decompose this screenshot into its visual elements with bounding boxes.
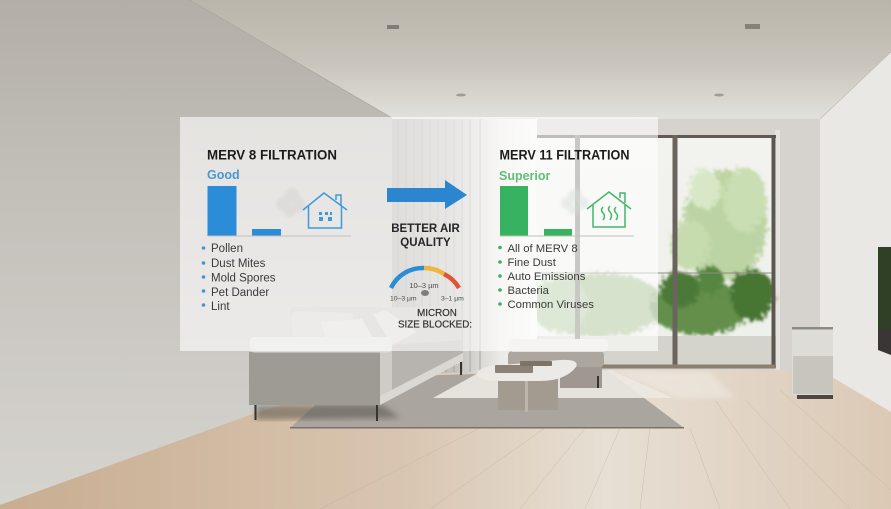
list: MERV 8 captures: Pollen	[211, 243, 243, 255]
icon: smoke cloud	[276, 188, 306, 217]
bar chart: MERV 8	[208, 186, 351, 236]
label: micron size blocked: SIZE BLOCKED:	[398, 320, 472, 330]
coffee table with books	[477, 360, 577, 412]
rating: Good: Good	[207, 168, 240, 182]
list: MERV 8 captures: Pet Dander	[211, 287, 269, 299]
panel: MERV 8	[202, 148, 351, 313]
list: MERV 8 captures: Lint	[211, 301, 230, 313]
gauge: micron size	[390, 268, 464, 302]
translucent panel	[180, 117, 658, 351]
sofa	[249, 307, 463, 421]
bar chart: MERV 11	[500, 186, 634, 236]
gauge: micron size: 10–3 µm	[409, 281, 439, 290]
label: better air quality	[391, 223, 460, 249]
icon: house with clean air	[587, 192, 631, 227]
wall-mounted tv	[878, 247, 891, 355]
label: better air quality: BETTER AIR	[391, 223, 460, 235]
arrow	[387, 180, 467, 209]
gauge: micron size: 10–3 µm	[390, 296, 417, 302]
gauge: micron size: 3–1 µm	[441, 296, 464, 302]
heading: MERV 8: MERV 8 FILTRATION	[207, 148, 337, 162]
list: MERV 8 captures: Mold Spores	[211, 272, 276, 284]
label: micron size blocked: MICRON	[417, 308, 457, 319]
list: MERV 11 captures: Common Viruses	[508, 299, 594, 311]
label: better air quality: QUALITY	[400, 237, 451, 249]
curtain	[392, 119, 537, 373]
icon: house with filter	[303, 193, 347, 228]
list: MERV 8 captures	[202, 243, 276, 313]
icon: faint smoke	[561, 189, 589, 215]
list: MERV 11 captures: Fine Dust	[508, 257, 557, 269]
rug	[290, 370, 684, 428]
label: micron size blocked	[398, 308, 472, 330]
ottoman	[508, 339, 608, 388]
panel: MERV 11	[498, 148, 634, 311]
air purifier	[792, 327, 833, 399]
ceiling lights	[387, 24, 760, 96]
list: MERV 11 captures: All of MERV 8	[508, 243, 578, 255]
window with garden view	[532, 135, 776, 368]
floor planks	[320, 390, 891, 509]
list: MERV 11 captures: Bacteria	[508, 285, 550, 297]
list: MERV 8 captures: Dust Mites	[211, 258, 266, 270]
rating: Superior: Superior	[499, 169, 551, 183]
list: MERV 11 captures	[498, 243, 594, 311]
heading: MERV 11: MERV 11 FILTRATION	[500, 148, 630, 162]
list: MERV 11 captures: Auto Emissions	[508, 271, 586, 283]
